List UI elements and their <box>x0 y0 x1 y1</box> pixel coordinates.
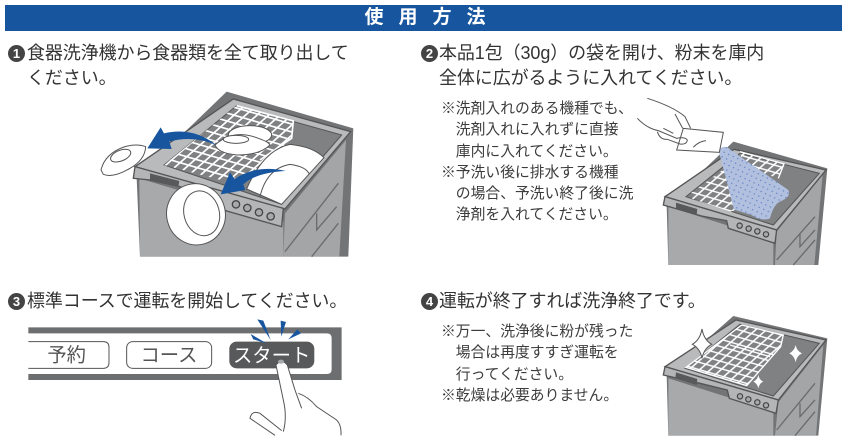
step 1 heading: ください。 <box>27 68 116 88</box>
step 3 number: 3 <box>13 294 20 309</box>
title band <box>5 5 842 31</box>
step 1 heading <box>27 43 349 88</box>
step 2 notes: 浄剤を入れてください。 <box>456 207 618 223</box>
step 2 heading: 本品1包（30g）の袋を開け、粉末を庫内 <box>439 43 764 63</box>
step 4 notes: 場合は再度すすぎ運転を <box>456 345 619 361</box>
step 2 number: 2 <box>426 46 433 61</box>
step 4 notes: 行ってください。 <box>456 367 573 383</box>
step 1 number <box>8 45 25 62</box>
button: course <box>127 342 212 368</box>
step 2 notes <box>441 100 633 223</box>
icon: blue press sparks <box>251 319 301 343</box>
icon: pressing hand <box>250 360 342 435</box>
step 4 heading: 運転が終了すれば洗浄終了です。 <box>439 291 706 311</box>
title band: 使用方法 <box>364 7 500 28</box>
button: reservation <box>28 342 109 368</box>
step 4 notes: ※乾燥は必要ありません。 <box>441 388 618 404</box>
step 2 notes: ※予洗い後に排水する機種 <box>441 165 619 181</box>
step 4 number: 4 <box>426 294 433 309</box>
step 1 heading: 食器洗浄機から食器類を全て取り出して <box>27 43 349 63</box>
step 4 number <box>421 293 438 310</box>
step 4 notes: ※万一、洗浄後に粉が残った <box>441 324 633 340</box>
illustration: pouring powder <box>637 98 827 265</box>
step 3 number <box>8 293 25 310</box>
button: start: スタート <box>233 345 310 367</box>
step 2 heading <box>439 43 764 88</box>
illustration: finished clean dishwasher <box>663 316 827 436</box>
step 2 number <box>421 45 438 62</box>
step 3 heading: 標準コースで運転を開始してください。 <box>27 291 347 311</box>
illustration: removing dishes from dishwasher <box>101 92 353 257</box>
step 2 notes: の場合、予洗い終了後に洗 <box>456 186 633 202</box>
step 4 notes <box>441 323 633 404</box>
step 2 notes: 洗剤入れに入れずに直接 <box>456 122 619 138</box>
step 2 heading: 全体に広がるように入れてください。 <box>439 68 742 88</box>
step 1 number: 1 <box>13 46 20 61</box>
illustration: control panel with start button <box>28 319 342 435</box>
step 2 notes: ※洗剤入れのある機種でも、 <box>441 101 633 117</box>
step 2 notes: 庫内に入れてください。 <box>456 144 618 160</box>
button: reservation: 予約 <box>47 345 86 367</box>
button: course: コース <box>140 346 197 367</box>
